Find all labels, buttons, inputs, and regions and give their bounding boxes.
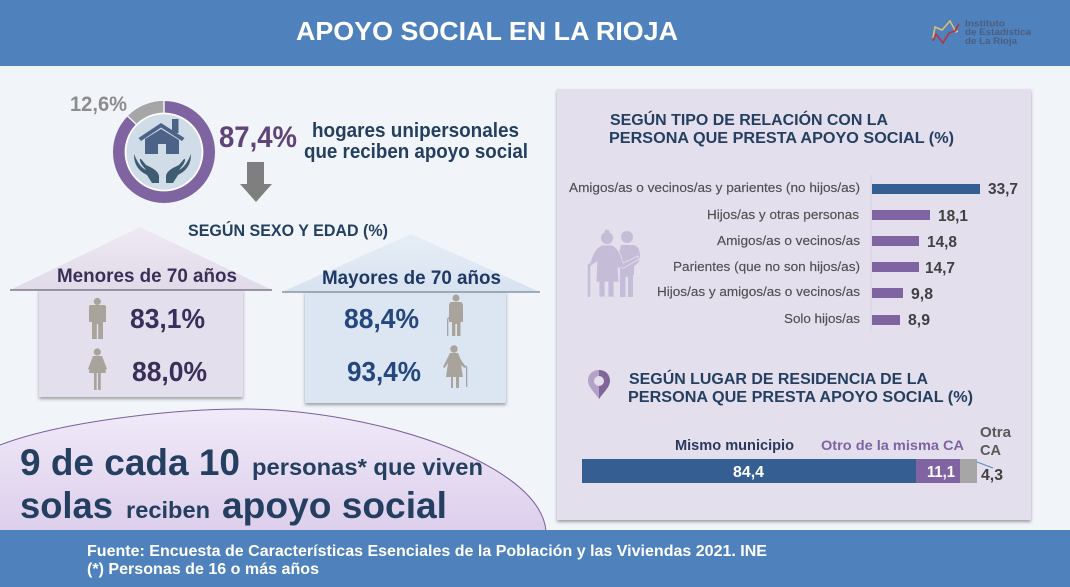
row: Amigos/as o vecinos/as y parientes (no hijos/as) [569,180,860,195]
logo: Instituto de Estadística de La Rioja: Instituto [965,18,1005,28]
stacked bar: lugar de residencia [582,425,1012,484]
panel: relation and residence [557,89,1031,520]
donut chart: 87,4% / 12,6% [119,100,209,197]
text: hogares unipersonales: que reciben apoyo social [304,141,528,163]
value: 83,1% [130,303,205,334]
icon: older man with cane [448,294,463,336]
callout: 9 de cada 10: reciben [126,497,210,523]
row: 33,7 [988,181,1018,198]
row: Solo hijos/as [784,311,860,326]
callout: 9 de cada 10: apoyo social [222,485,447,526]
row: Hijos/as y amigos/as o vecinos/as [657,284,860,299]
logo: Instituto de Estadística de La Rioja: de La Rioja [965,36,1018,46]
source note: Fuente: Encuesta de Características Esenciales de la Población y las Viviendas 2021. INE [87,543,767,560]
stacked bar: lugar de residencia: Otra [980,425,1012,441]
logo: Instituto de Estadística de La Rioja: de Estadística [965,27,1032,37]
stacked bar: lugar de residencia: CA [980,443,1001,459]
label 12,6%: 12,6% [70,93,127,116]
heading: Mayores de 70 años [322,268,501,289]
row [784,311,930,329]
stacked bar: lugar de residencia: Mismo municipio [675,438,794,454]
callout: 9 de cada 10: solas [20,485,113,526]
row [657,284,933,303]
stacked bar: lugar de residencia: 84,4 [733,464,764,481]
icon: elderly couple [589,230,640,297]
row: 14,7 [925,260,955,277]
header band [0,0,1070,66]
row [707,207,968,225]
row: Parientes (que no son hijos/as) [673,259,860,274]
title: APOYO SOCIAL EN LA RIOJA [296,16,678,46]
icon: woman [88,348,107,390]
callout: 9 de cada 10 [0,409,546,531]
arrow down [240,162,272,202]
heading: según lugar de residencia: SEGÚN LUGAR DE RESIDENCIA DE LA [629,369,928,388]
heading: Menores de 70 años [57,266,237,287]
footer band [0,530,1070,587]
heading: según tipo de relación: SEGÚN TIPO DE RELACIÓN CON LA [610,110,888,129]
row: 9,8 [911,286,933,303]
heading: según sexo y edad: SEGÚN SEXO Y EDAD (%) [188,221,388,240]
house: mayores de 70 años [282,234,540,403]
source note: (*) Personas de 16 o más años [87,561,319,578]
value: 88,0% [132,356,207,387]
icon: house in hands [134,119,191,183]
stacked bar: lugar de residencia: 4,3 [981,467,1003,484]
value: 88,4% [344,303,419,334]
icon: older woman with cane [443,345,467,388]
heading: según tipo de relación: PERSONA QUE PRESTA APOYO SOCIAL (%) [609,130,954,147]
logo: Instituto de Estadística de La Rioja [933,18,1032,46]
row [717,233,957,251]
callout: 9 de cada 10: personas* que viven [252,454,483,480]
row: 8,9 [908,312,930,329]
value: 93,4% [347,356,421,387]
row [673,259,955,277]
icon: man [89,298,106,339]
row [569,180,1018,198]
house: menores de 70 años [10,227,272,397]
label 87,4%: 87,4% [219,121,297,154]
callout: 9 de cada 10: 9 de cada 10 [20,442,240,483]
row: Hijos/as y otras personas [707,207,859,222]
row: 18,1 [938,208,968,225]
stacked bar: lugar de residencia: 11,1 [927,464,955,481]
text: hogares unipersonales: hogares unipersonales [312,120,519,142]
heading: según lugar de residencia: PERSONA QUE PRESTA APOYO SOCIAL (%) [628,389,973,406]
row: Amigos/as o vecinos/as [717,233,860,248]
icon: location pin [588,370,610,399]
stacked bar: lugar de residencia: Otro de la misma CA [821,438,964,454]
row: 14,8 [927,234,957,251]
bar chart: tipo de relación [569,175,1018,332]
